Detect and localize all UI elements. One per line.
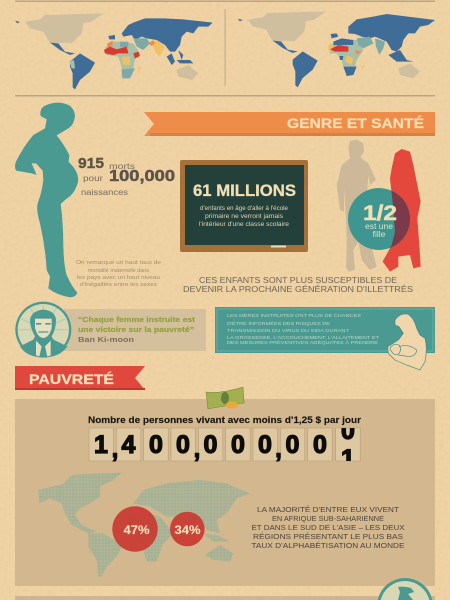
- stat: maternal deaths: [78, 155, 175, 197]
- quote panel: [64, 309, 206, 351]
- quote panel: “Chaque femme instruite est: [78, 315, 196, 324]
- callout: one half is a girl: [348, 188, 410, 250]
- text: maternal mortality note: les pays avec un haut niveau: [77, 275, 160, 281]
- panel: educated mothers: DES MESURES PRÉVENTIVES ADÉQUATES À PRENDRE: [227, 339, 378, 345]
- icon: bottom portrait stamp: [378, 578, 432, 600]
- icon: girl silhouette: [383, 149, 421, 272]
- icon: banknote and coins: [206, 387, 244, 409]
- counter: 1,400,000,001: ,: [194, 435, 200, 463]
- panel: educated mothers: LES MÈRES INSTRUITES ONT PLUS DE CHANCES: [227, 312, 361, 318]
- stat: maternal deaths: naissances: [81, 188, 128, 197]
- counter: 1,400,000,001: 1: [341, 445, 355, 473]
- callout: one half is a girl: fille: [373, 229, 386, 239]
- counter: 1,400,000,001: 0: [258, 431, 272, 459]
- text: regions: LA MAJORITÉ D'ENTRE EUX VIVENT: [257, 505, 400, 514]
- panel: educated mothers: [215, 307, 435, 353]
- blackboard: primaire ne verront jamais: [205, 213, 284, 220]
- text: illiterate generation: CES ENFANTS SONT PLUS SUSCEPTIBLES DE: [199, 276, 397, 285]
- callout: one half is a girl: est une: [365, 221, 393, 231]
- blackboard: l'intérieur d'une classe scolaire: [199, 221, 289, 228]
- counter: 1,400,000,001: 0: [204, 431, 217, 459]
- heading: people living on less than 1.25 dollars: Nombre de personnes vivant avec moins d'1,25 $ par jour: [88, 415, 362, 425]
- stat: maternal deaths: pour: [83, 174, 103, 183]
- text: illiterate generation: DEVENIR LA PROCHAINE GÉNÉRATION D'ILLETTRÉS: [183, 285, 413, 294]
- stat: maternal deaths: 915: [78, 155, 104, 172]
- stat: maternal deaths: 100,000: [109, 168, 175, 185]
- counter: 1,400,000,001: 1: [94, 431, 108, 459]
- icon: mother and baby outline: [388, 314, 426, 370]
- text: regions: EN AFRIQUE SUB-SAHARIENNE: [272, 514, 384, 523]
- world map: right: [238, 11, 435, 87]
- quote panel: Ban Ki-moon: [78, 335, 134, 344]
- callout: 34%: 34%: [174, 523, 201, 537]
- text: maternal mortality note: mortalité maternelle dans: [88, 268, 149, 274]
- icon: Ban Ki-moon portrait stamp: [15, 302, 71, 358]
- panel: educated mothers: TRANSMISSION DU VIRUS DU SIDA DURANT: [227, 328, 349, 333]
- callout: 34%: [170, 512, 205, 546]
- callout: one half is a girl: 1/2: [363, 202, 397, 225]
- stat: maternal deaths: morts: [109, 162, 135, 171]
- counter: 1,400,000,001: 0: [176, 431, 190, 459]
- counter: 1,400,000,001: 0: [231, 431, 245, 459]
- blackboard: 61 MILLIONS: [193, 182, 296, 200]
- counter: 1,400,000,001: [88, 428, 360, 462]
- quote panel: une victoire sur la pauvreté”: [78, 325, 194, 334]
- banner: genre et santé: GENRE ET SANTÉ: [287, 115, 424, 131]
- counter: 1,400,000,001: 0: [341, 417, 355, 445]
- text: maternal mortality note: [76, 260, 161, 288]
- panel: educated mothers: D'ÊTRE INFORMÉES DES RISQUES DE: [227, 319, 330, 326]
- counter: 1,400,000,001: 0: [149, 431, 163, 459]
- counter: 1,400,000,001: 4: [122, 431, 136, 459]
- blackboard: [180, 160, 308, 252]
- text: regions: [252, 505, 405, 550]
- counter: 1,400,000,001: 0: [313, 431, 327, 459]
- text: regions: RÉGIONS PRÉSENTANT LE PLUS BAS: [253, 532, 403, 541]
- text: maternal mortality note: d'inégalités entre les sexes: [80, 282, 157, 288]
- callout: 47%: 47%: [124, 523, 150, 537]
- counter: 1,400,000,001: ,: [112, 435, 118, 463]
- callout: 47%: [112, 506, 158, 552]
- text: illiterate generation: [183, 276, 413, 294]
- blackboard: d'enfants en âge d'aller à l'école: [200, 205, 288, 212]
- text: maternal mortality note: On remarque un haut taux de: [76, 260, 161, 266]
- banner: pauvreté: PAUVRETÉ: [29, 371, 114, 387]
- banner: pauvreté: [15, 366, 145, 390]
- world map: left: [15, 13, 213, 89]
- icon: pregnant woman silhouette: [15, 103, 78, 297]
- counter: 1,400,000,001: ,: [275, 435, 282, 463]
- text: regions: TAUX D'ALPHABÉTISATION AU MONDE: [252, 541, 405, 550]
- counter: 1,400,000,001: 0: [286, 431, 299, 459]
- panel: educated mothers: LA GROSSESSE, L'ACCOUCHEMENT, L'ALLAITEMENT ET: [227, 335, 379, 340]
- panel: pauvreté: [15, 399, 435, 600]
- icon: boy silhouette: [337, 140, 377, 272]
- banner: genre et santé: [144, 112, 435, 136]
- dotted world map: [38, 473, 250, 577]
- text: regions: ET DANS LE SUD DE L'ASIE – LES DEUX: [252, 523, 405, 532]
